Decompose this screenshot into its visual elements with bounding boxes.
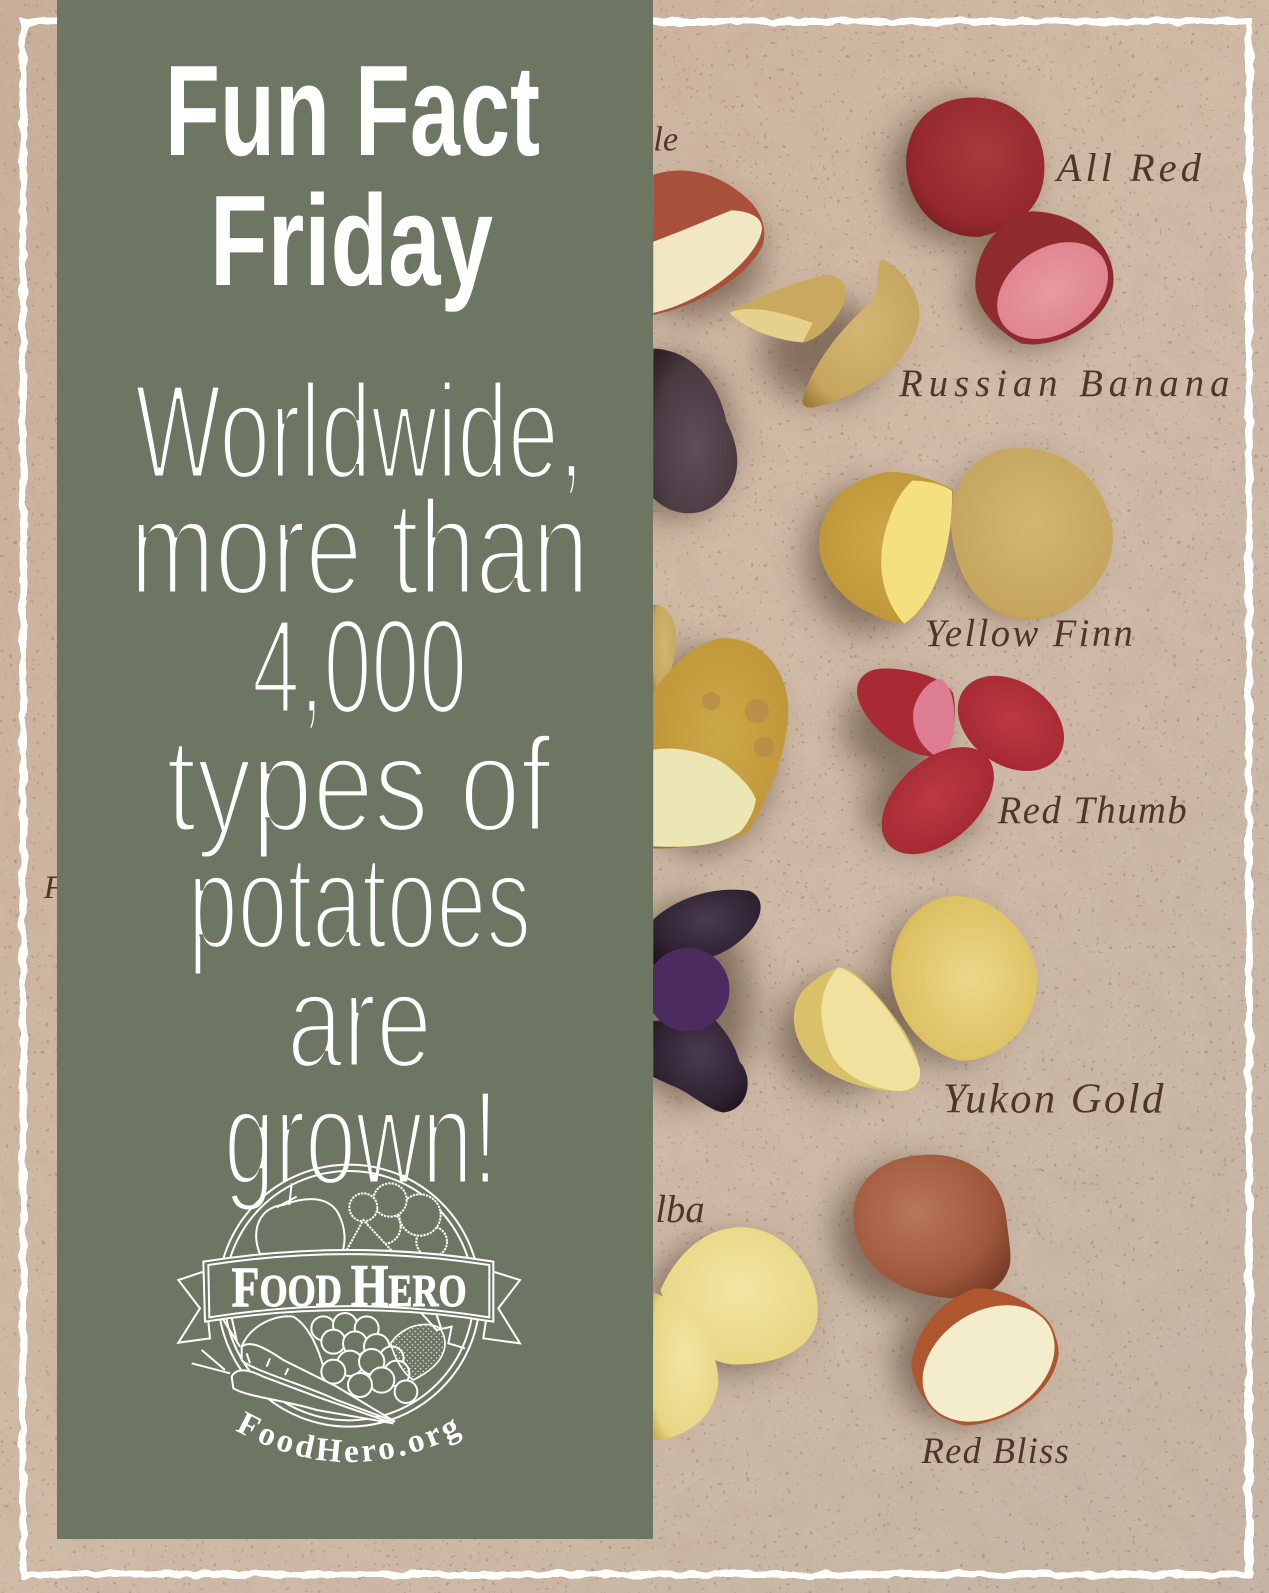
potato: tan at panel edge (653, 605, 676, 698)
handwritten label: Red Bliss: Red Bliss (921, 1430, 1069, 1471)
logo: banner (203, 1250, 493, 1322)
handwritten label: Yellow Finn: Yellow Finn (925, 613, 1133, 655)
potato: Red Bliss cut (899, 1280, 1078, 1447)
potatoes: dark purple cluster (646, 890, 761, 1113)
fact text: grown! (224, 1062, 498, 1213)
fact text: Worldwide, (135, 356, 584, 507)
logo: apple (256, 1183, 345, 1254)
fact text: are (287, 945, 432, 1096)
fact text: 4,000 (252, 591, 467, 742)
potato: Red Thumb cut (857, 669, 955, 757)
potato: purple skin (653, 348, 737, 513)
logo: Food Hero badge (176, 1164, 522, 1462)
potato: Yellow Finn half (819, 472, 953, 624)
potato: Alba whole (653, 1292, 718, 1441)
potato: large russet with cut end (653, 638, 788, 848)
handwritten label: Yukon Gold: Yukon Gold (943, 1076, 1164, 1123)
handwritten label: Red Thumb: Red Thumb (997, 790, 1187, 832)
handwritten label fragment: le (653, 120, 678, 158)
title: Fun Fact Friday: Fun Fact (165, 39, 540, 183)
potato: Russian Banana long (802, 259, 919, 408)
panel: green text column (57, 0, 653, 1539)
logo: broccoli (347, 1183, 447, 1257)
potato: All Red cut (975, 211, 1127, 360)
potato: Yukon Gold whole (891, 896, 1037, 1061)
fact text: potatoes (188, 826, 531, 977)
logo: FOOD HERO wordmark: FOOD HERO (232, 1253, 467, 1319)
fact text: more than (130, 472, 589, 623)
logo: FoodHero.org url: FoodHero.org (236, 1411, 462, 1462)
title: Fun Fact Friday (165, 39, 540, 313)
potato: Russian Banana piece (729, 274, 846, 342)
potato: Yukon Gold half (794, 967, 920, 1091)
fact text: types of (166, 709, 551, 860)
logo: tomato behind carrots (242, 1316, 327, 1380)
handwritten label fragment at left edge: F (43, 870, 65, 906)
handwritten label: Russian Banana: Russian Banana (898, 363, 1229, 405)
potato: Red Thumb whole right (940, 656, 1082, 791)
potato: Red Bliss whole (853, 1155, 1010, 1298)
logo: url arc guide (235, 1430, 465, 1462)
handwritten label fragment: Alba: lba (655, 1189, 705, 1231)
logo ring (218, 1165, 480, 1427)
potato: All Red whole (906, 98, 1044, 237)
logo: carrots (192, 1310, 395, 1423)
logo: grapes (311, 1313, 417, 1403)
potato: red skin white flesh at panel edge (653, 170, 764, 315)
logo: strawberry (391, 1312, 465, 1380)
logo: ribbon tails (178, 1272, 520, 1343)
potato: Red Thumb whole lower (861, 726, 1014, 875)
fact text (130, 356, 589, 1213)
potato: Yellow Finn whole (951, 448, 1113, 620)
potato: Alba half (660, 1227, 818, 1364)
title: Fun Fact Friday: Friday (210, 169, 493, 313)
handwritten label: All Red: All Red (1054, 145, 1202, 190)
